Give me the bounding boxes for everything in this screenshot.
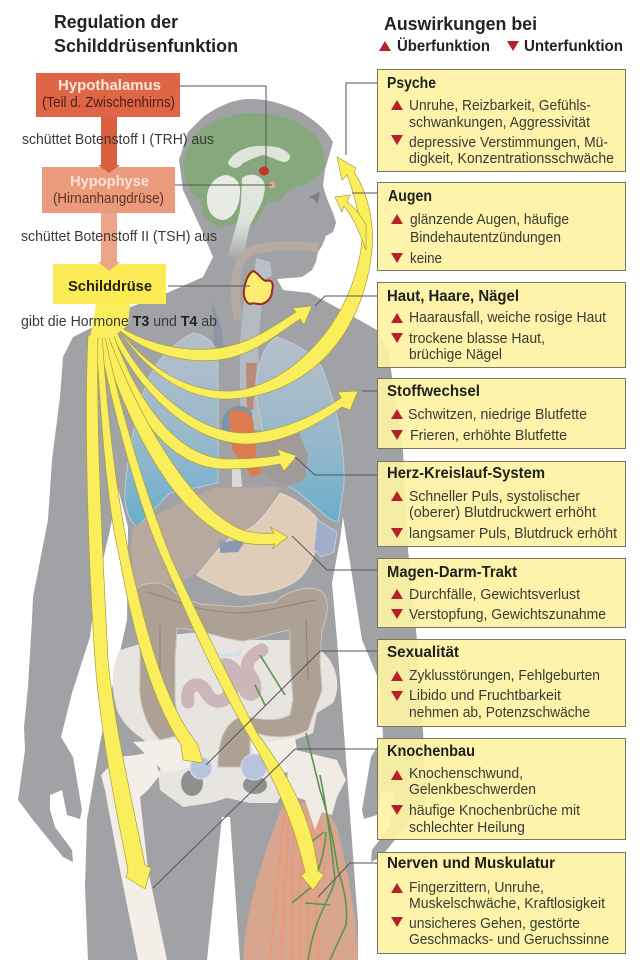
eye brow xyxy=(309,192,320,204)
arrow: to stomach xyxy=(100,330,288,549)
text: underfunction: keine xyxy=(410,250,442,267)
leader lines xyxy=(153,83,378,897)
icon: down xyxy=(391,253,403,263)
panel: Psyche xyxy=(378,70,626,172)
arrow: to metabolism xyxy=(108,322,358,444)
icon: up xyxy=(391,589,403,599)
icon: down xyxy=(391,917,403,927)
text: TRH: schüttet Botenstoff I (TRH) aus xyxy=(22,131,214,148)
arrow: to heart xyxy=(105,325,297,471)
panel: Stoffwechsel xyxy=(378,378,626,448)
label: Hypophyse xyxy=(53,173,164,207)
arrow: to eyes xyxy=(335,195,366,250)
text: underfunction: nehmen ab, Potenzschwäche xyxy=(409,704,590,721)
heading: Haut, Haare, Nägel xyxy=(387,288,519,305)
text: overfunction: Haarausfall, weiche rosige Haut xyxy=(409,309,607,326)
neck: pharynx and trachea xyxy=(212,246,318,430)
hip joint right xyxy=(241,754,267,780)
text: overfunction: Schneller Puls, systolischer xyxy=(409,488,580,505)
stomach xyxy=(197,493,318,595)
title: Regulation: Regulation der xyxy=(54,11,178,32)
panel: Herz-Kreislauf-System xyxy=(378,462,626,546)
liver xyxy=(132,487,280,587)
text: underfunction: brüchige Nägel xyxy=(409,346,502,363)
legend: Unterfunktion xyxy=(524,38,623,55)
vessel under liver xyxy=(220,538,247,553)
text: underfunction xyxy=(409,134,614,167)
icon: down xyxy=(391,691,403,701)
colon xyxy=(132,583,327,767)
text: overfunction: Fingerzittern, Unruhe, xyxy=(409,879,544,896)
right acetabulum xyxy=(250,738,300,775)
panel: Augen xyxy=(378,182,626,270)
arrow: to brain xyxy=(114,157,373,399)
arrow: to ovary xyxy=(96,333,203,763)
right femur upper xyxy=(287,748,346,830)
obturator foramen left xyxy=(181,770,203,796)
icon: down xyxy=(391,528,403,538)
text: underfunction: schlechter Heilung xyxy=(409,819,525,836)
heart and great vessels xyxy=(222,363,308,487)
right thigh muscle xyxy=(243,800,358,960)
arrow: to skin xyxy=(108,306,312,361)
hypothalamus xyxy=(259,166,269,176)
brain stem xyxy=(228,175,265,257)
text: underfunction: Verstopfung, Gewichtszunahme xyxy=(409,606,606,623)
arrow: to muscle xyxy=(98,332,324,890)
icon: down xyxy=(391,135,403,145)
title: Regulation xyxy=(54,11,238,56)
panel: Sexualität xyxy=(378,640,626,726)
text: overfunction xyxy=(410,211,569,246)
text: underfunction xyxy=(409,687,590,721)
text: overfunction: Knochenschwund, xyxy=(409,765,523,782)
text: underfunction: Geschmacks- und Geruchssinne xyxy=(409,931,609,948)
icon: up xyxy=(391,671,403,681)
legend: Überfunktion xyxy=(397,38,490,55)
text: underfunction: unsicheres Gehen, gestörte xyxy=(409,915,580,932)
heading: Stoffwechsel xyxy=(387,383,480,400)
human body silhouette xyxy=(18,99,426,960)
heading: Nerven und Muskulatur xyxy=(387,855,555,872)
pituitary gland xyxy=(268,182,276,188)
icon: up xyxy=(391,409,403,419)
text: underfunction: langsamer Puls, Blutdruck erhöht xyxy=(409,525,618,542)
icon: down xyxy=(391,333,403,343)
label: Hypothalamus: Hypothalamus xyxy=(58,77,161,94)
right lung xyxy=(257,337,344,522)
cerebellum xyxy=(207,175,240,220)
text: overfunction xyxy=(409,488,597,521)
left lung xyxy=(125,333,218,527)
panel: Nerven und Muskulatur xyxy=(378,852,626,954)
label: Hypothalamus: (Teil d. Zwischenhirns) xyxy=(42,95,175,111)
text: overfunction: Muskelschwäche, Kraftlosigkeit xyxy=(409,895,606,912)
box: Schilddrüse xyxy=(53,264,166,304)
brain xyxy=(183,113,325,257)
label: Hypophyse: Hypophyse xyxy=(70,173,149,190)
box: Hypophyse xyxy=(42,167,175,213)
icon: up xyxy=(391,214,403,224)
legend xyxy=(379,38,623,55)
arrow: Hypothalamus to Hypophyse xyxy=(98,117,120,173)
text: overfunction xyxy=(409,97,591,131)
icon: up xyxy=(391,770,403,780)
heading: Psyche xyxy=(387,75,436,92)
text: underfunction xyxy=(409,802,581,836)
icon: down xyxy=(391,805,403,815)
text: underfunction: häufige Knochenbrüche mit xyxy=(409,802,581,819)
icon: up xyxy=(391,100,403,110)
label: Schilddrüse: Schilddrüse xyxy=(68,278,152,295)
icon: up xyxy=(391,491,403,501)
text: overfunction: Bindehautentzündungen xyxy=(410,229,561,246)
text: underfunction: trockene blasse Haut, xyxy=(409,330,545,347)
text: overfunction: Schwitzen, niedrige Blutfette xyxy=(408,406,587,423)
arrow: to bone xyxy=(86,335,151,889)
text: hormones: gibt die Hormone T3 und T4 ab xyxy=(21,313,217,330)
text: overfunction: Durchfälle, Gewichtsverlust xyxy=(409,586,581,603)
icon: up xyxy=(391,313,403,323)
panel: Haut, Haare, Nägel xyxy=(378,282,626,368)
title: Regulation: Schilddrüsenfunktion xyxy=(54,35,238,56)
left acetabulum xyxy=(133,738,200,773)
pelvis xyxy=(113,632,337,807)
thyroid gland xyxy=(244,271,273,304)
arrow: Hypophyse to Schilddrüse xyxy=(98,213,120,271)
left femur xyxy=(101,752,167,960)
text: TSH: schüttet Botenstoff II (TSH) aus xyxy=(21,228,217,245)
box: Hypothalamus xyxy=(36,73,180,117)
arrow fan root xyxy=(90,304,130,338)
icon: up xyxy=(391,883,403,893)
text: overfunction: Gelenkbeschwerden xyxy=(409,781,536,798)
text: overfunction: (oberer) Blutdruckwert erhöht xyxy=(409,504,597,521)
text: underfunction: digkeit, Konzentrationsschwäche xyxy=(409,150,614,167)
small intestine xyxy=(188,650,262,702)
text: underfunction xyxy=(409,330,545,363)
panel: Magen-Darm-Trakt xyxy=(378,558,626,628)
nerves xyxy=(255,655,347,960)
obturator foramen right xyxy=(243,776,267,794)
label: Hypothalamus xyxy=(42,77,175,111)
bladder xyxy=(207,648,242,657)
text: underfunction: Libido und Fruchtbarkeit xyxy=(409,687,562,704)
corpus callosum xyxy=(228,146,290,168)
heading: Magen-Darm-Trakt xyxy=(387,564,517,581)
text: overfunction: Unruhe, Reizbarkeit, Gefühls- xyxy=(409,97,591,114)
text: overfunction xyxy=(409,879,606,912)
text: underfunction xyxy=(409,915,609,948)
text: overfunction: Zyklusstörungen, Fehlgeburten xyxy=(409,667,600,684)
label: Hypophyse: (Hirnanhangdrüse) xyxy=(53,191,164,207)
icon: down xyxy=(391,609,403,619)
icon: down xyxy=(391,430,403,440)
hip joint left xyxy=(190,757,212,779)
title: Auswirkungen: Auswirkungen bei xyxy=(384,13,537,34)
spleen xyxy=(314,520,337,557)
heading: Herz-Kreislauf-System xyxy=(387,465,545,482)
heading: Augen xyxy=(388,188,432,205)
text: overfunction: glänzende Augen, häufige xyxy=(410,211,569,228)
text: underfunction: depressive Verstimmungen, Mü- xyxy=(409,134,608,151)
text: underfunction: Frieren, erhöhte Blutfette xyxy=(410,427,567,444)
panel: Knochenbau xyxy=(378,738,626,840)
text: overfunction xyxy=(409,765,536,798)
heading: Sexualität xyxy=(387,644,459,661)
text: overfunction: schwankungen, Aggressivität xyxy=(409,114,591,131)
heading: Knochenbau xyxy=(387,743,475,760)
